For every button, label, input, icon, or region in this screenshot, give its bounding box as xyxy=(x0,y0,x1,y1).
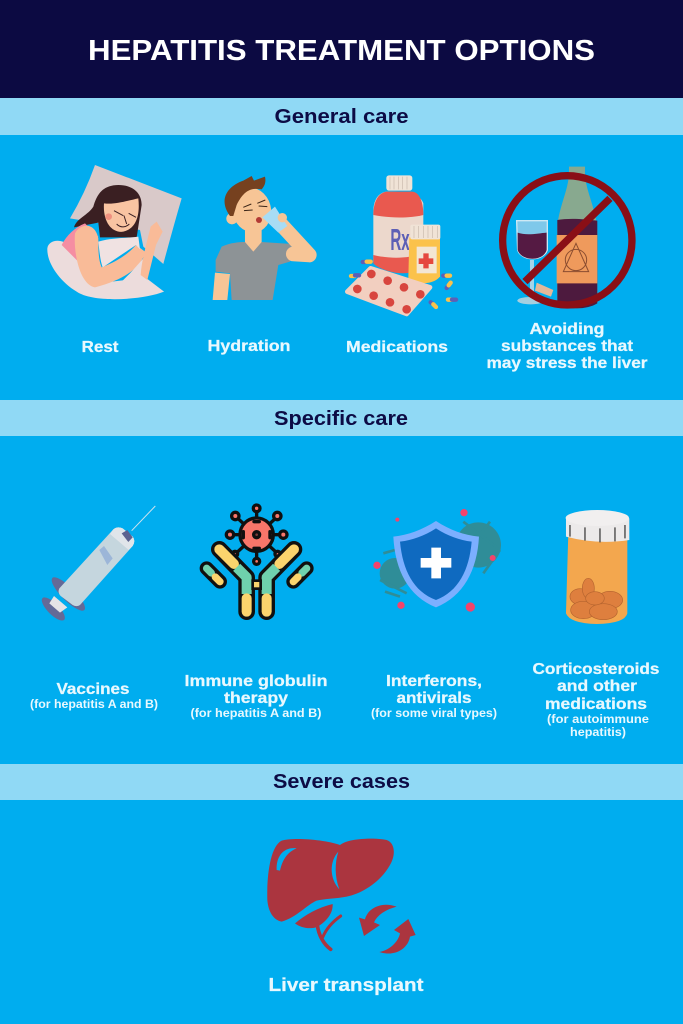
label: corticosteroids: hepatitis) xyxy=(570,727,626,739)
icon: woman resting xyxy=(47,165,182,299)
label: interferons, antivirals xyxy=(371,673,497,720)
label: interferons, antivirals: (for some viral types) xyxy=(371,708,497,720)
section heading: severe cases: Severe cases xyxy=(273,771,410,793)
section heading: specific care xyxy=(0,400,683,436)
label: medications: Medications xyxy=(346,339,448,356)
icon: shield with viruses xyxy=(373,509,501,612)
label: rest: Rest xyxy=(82,339,118,356)
icon: pill bottle xyxy=(566,510,629,624)
label: hydration: Hydration xyxy=(208,338,290,355)
label: liver transplant: Liver transplant xyxy=(268,974,424,995)
icon: immune globulin antibody xyxy=(207,505,307,612)
label: avoiding substances: substances that xyxy=(501,338,633,355)
icon: no alcohol xyxy=(503,167,632,308)
icon: syringe xyxy=(38,506,155,624)
label: immune globulin therapy: (for hepatitis A and B) xyxy=(190,708,322,720)
label: immune globulin therapy xyxy=(184,673,328,720)
label: vaccines: Vaccines xyxy=(56,681,130,698)
label: corticosteroids xyxy=(532,661,660,739)
label: corticosteroids: (for autoimmune xyxy=(547,714,649,726)
label: avoiding substances: may stress the liver xyxy=(486,355,648,372)
label: vaccines: (for hepatitis A and B) xyxy=(30,699,158,711)
label: corticosteroids: and other xyxy=(557,678,637,695)
label: corticosteroids: medications xyxy=(545,696,647,713)
label: avoiding substances xyxy=(486,321,648,372)
label: corticosteroids: Corticosteroids xyxy=(532,661,660,678)
section heading: specific care: Specific care xyxy=(274,408,408,430)
label: vaccines xyxy=(30,681,158,711)
icon: medications xyxy=(347,175,456,314)
icon: man drinking water xyxy=(213,176,309,300)
label: interferons, antivirals: Interferons, xyxy=(386,673,482,690)
label: immune globulin therapy: therapy xyxy=(224,690,288,707)
label: interferons, antivirals: antivirals xyxy=(396,690,472,707)
title banner xyxy=(0,0,683,98)
section heading: general care xyxy=(0,98,683,135)
section heading: severe cases xyxy=(0,764,683,800)
title banner: HEPATITIS TREATMENT OPTIONS xyxy=(88,35,595,67)
section heading: general care: General care xyxy=(274,106,408,128)
label: avoiding substances: Avoiding xyxy=(530,321,604,338)
label: immune globulin therapy: Immune globulin xyxy=(184,673,328,690)
icon: medications: Rx xyxy=(390,223,410,257)
icon: liver with transplant arrows xyxy=(267,839,416,954)
